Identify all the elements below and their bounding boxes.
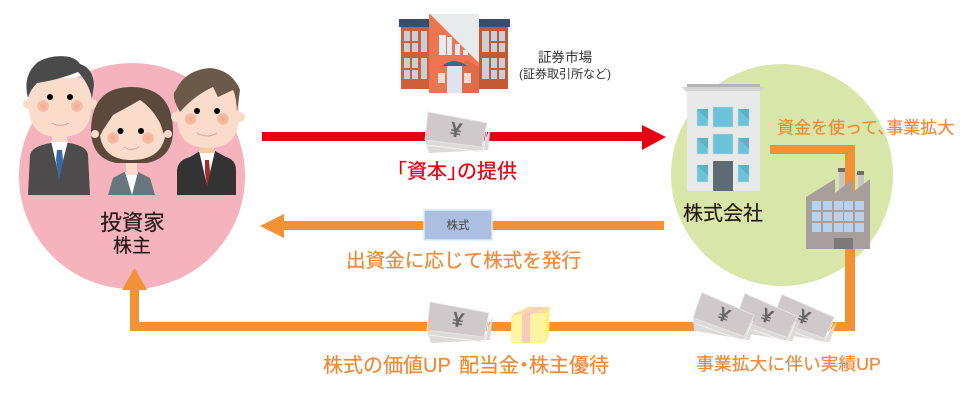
arrow: business expansion flow xyxy=(770,145,855,331)
arrow: share issuance xyxy=(260,214,664,238)
label: capital provision: 「資本」の提供 xyxy=(387,160,517,183)
panel: investor circle xyxy=(19,63,245,289)
icon: older man xyxy=(23,56,97,195)
label: stock exchange: (証券取引所など) xyxy=(519,66,611,81)
arrow: capital provision xyxy=(262,125,666,150)
label: value rise and dividend: 配当金 xyxy=(459,354,519,377)
icon: share certificate: 株式 xyxy=(446,218,470,232)
icon: three bills xyxy=(690,292,840,346)
label: business growth: 事業拡大に伴い実績UP xyxy=(696,354,881,374)
label: investors and shareholders: 投資家 xyxy=(100,211,165,235)
icon: factory xyxy=(806,168,870,249)
icon: office building xyxy=(682,84,765,191)
icon: bill on return arrow xyxy=(427,302,493,343)
icon: woman xyxy=(91,87,173,195)
label: company: 株式会社 xyxy=(683,202,763,225)
label: use funds: 資金を使って、事業拡大 xyxy=(777,118,954,138)
icon: stock exchange building xyxy=(399,14,510,93)
icon: bill on capital arrow xyxy=(425,112,491,153)
label: stock exchange xyxy=(519,50,611,81)
label: value rise and dividend: ・株主優待 xyxy=(514,355,609,377)
icon: gift box xyxy=(511,307,550,343)
label: investors and shareholders: 株主 xyxy=(113,235,151,257)
arrow: value and dividend return xyxy=(122,268,700,331)
icon: share certificate xyxy=(424,210,492,240)
label: stock exchange: 証券市場 xyxy=(538,50,593,65)
icon: young man xyxy=(171,68,245,195)
panel: company circle xyxy=(671,64,893,286)
label: value rise and dividend: 株式の価値UP xyxy=(323,355,451,377)
label: investors and shareholders xyxy=(100,211,165,257)
label: issue shares: 出資金に応じて株式を発行 xyxy=(346,250,581,272)
